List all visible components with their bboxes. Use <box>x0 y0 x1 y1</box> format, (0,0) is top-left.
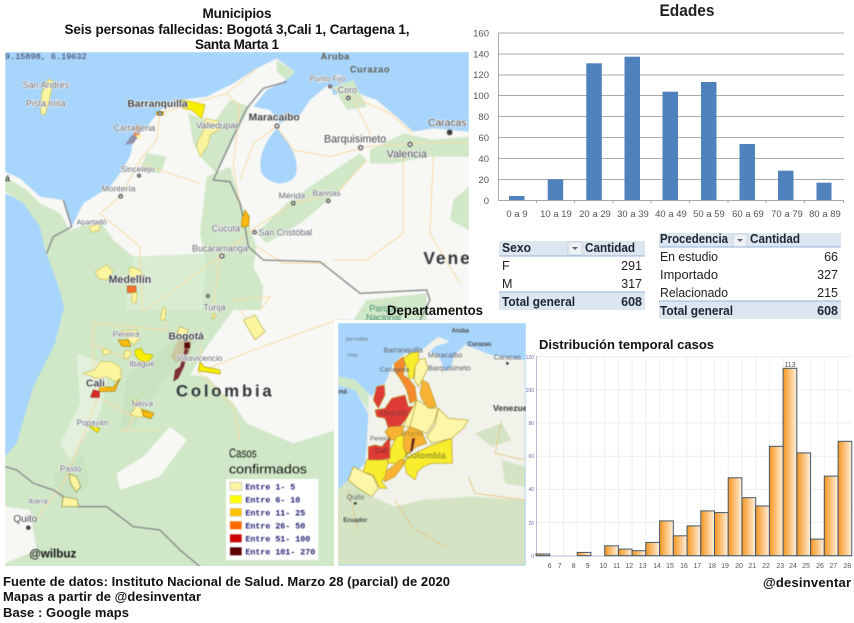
bar chart: distribución temporal: 8 <box>572 563 576 570</box>
place labels south: Villavicencio <box>177 353 223 363</box>
legend: casos confirmados: confirmados <box>229 462 307 477</box>
bar chart: distribución temporal: 120 <box>526 355 534 361</box>
place labels north: Venezuela <box>423 248 525 268</box>
place labels north: Aruba <box>321 51 350 61</box>
source notes <box>3 574 450 620</box>
table: procedencia <box>659 232 841 319</box>
table: procedencia: 66 <box>824 250 838 264</box>
table: sexo: 291 <box>621 259 642 273</box>
heading: distribución temporal: Distribución temporal casos <box>539 337 714 352</box>
bar chart: distribución temporal: 18 <box>708 563 716 570</box>
place labels north <box>5 52 469 320</box>
table: sexo: 608 <box>621 295 642 309</box>
municipal polygons north <box>41 79 53 115</box>
green relief north <box>5 177 134 310</box>
bar chart: distribución temporal: 23 <box>776 563 784 570</box>
legend: casos confirmados: Entre 1- 5 <box>245 482 295 492</box>
place labels: Barranquilla <box>384 346 424 355</box>
place labels: Pista <box>348 353 358 358</box>
bar chart: edades: 10 a 19 <box>540 209 572 220</box>
municipal polygons south <box>62 315 265 507</box>
place labels north: Cúcuta <box>212 224 240 234</box>
bar chart: distribución temporal: 11 <box>613 563 620 570</box>
table: procedencia: Procedencia <box>660 232 729 246</box>
place labels south: Pereira <box>113 329 140 339</box>
place labels: má <box>338 389 348 395</box>
place labels north: Parque <box>369 304 398 314</box>
heading: edades: Edades <box>660 2 714 20</box>
bar chart: distribución temporal: 22 <box>762 563 770 570</box>
place labels north: Punto Fijo <box>309 74 346 83</box>
legend: casos confirmados: Entre 101- 270 <box>245 547 315 557</box>
place labels: Cartagena <box>380 366 410 373</box>
bar chart: distribución temporal: 0 <box>531 554 534 560</box>
place labels: Quito <box>347 492 364 501</box>
place labels north: Pista Inita <box>26 99 65 109</box>
credit: desinventar: @desinventar <box>763 575 851 590</box>
land south <box>5 310 337 567</box>
place labels north: Caracas <box>428 118 466 129</box>
bar chart: edades: 100 <box>473 91 489 102</box>
place labels <box>338 328 535 524</box>
bar chart: distribución temporal: 60 <box>528 454 534 460</box>
table: sexo: M <box>502 277 512 291</box>
bar chart: distribución temporal: 40 <box>528 487 534 493</box>
bar chart: edades: 140 <box>473 50 489 60</box>
roads north <box>100 68 469 320</box>
table: procedencia: 327 <box>817 268 838 282</box>
place labels: San Andrés <box>346 337 368 342</box>
bar chart: distribución temporal: 100 <box>526 388 534 394</box>
coordinate readout: 9.15898, 6.19632 <box>5 52 87 62</box>
panel: department map <box>338 323 535 566</box>
roads south <box>33 310 337 523</box>
source notes: Fuente de datos: Instituto Nacional de Salud. Marzo 28 (parcial) de 2020 <box>3 574 450 589</box>
bar chart: distribución temporal: 7 <box>558 563 562 570</box>
bar chart: distribución temporal: 17 <box>693 563 701 570</box>
base land <box>356 336 526 507</box>
place labels north: Bucaramanga <box>192 244 248 254</box>
table: sexo: Sexo <box>502 241 531 255</box>
place labels north: Montería <box>101 183 136 193</box>
place labels south: Colombia <box>176 382 272 401</box>
land mass north <box>5 58 469 320</box>
bar chart: distribución temporal: 113 <box>784 362 796 369</box>
legend: casos confirmados <box>226 446 318 560</box>
place labels north: Valencia <box>387 148 427 160</box>
place labels north: Valledupar <box>196 121 238 131</box>
place labels north: San Andrés <box>23 80 70 90</box>
place labels south: Quito <box>13 514 38 525</box>
table: procedencia: En estudio <box>660 250 718 264</box>
place labels south: Neiva <box>132 399 153 409</box>
city markers <box>119 85 452 297</box>
place labels north: Coro <box>338 85 357 95</box>
bar chart: distribución temporal: 20 <box>735 563 743 570</box>
place labels: Colombia <box>405 450 447 460</box>
legend: casos confirmados: Entre 26- 50 <box>245 521 305 531</box>
title: municipios: Municipios <box>202 6 272 21</box>
credit: wilbuz: @wilbuz <box>29 548 76 561</box>
legend: casos confirmados: Entre 51- 100 <box>245 534 310 544</box>
bar chart: distribución temporal: 15 <box>666 563 674 570</box>
legend: casos confirmados: Casos <box>229 446 257 461</box>
bar chart: edades <box>473 28 844 220</box>
place labels: Venezuela <box>493 403 535 413</box>
title: municipios <box>64 6 410 52</box>
table: procedencia: Total general <box>660 304 733 318</box>
bar chart: edades: 0 <box>484 196 489 207</box>
place labels south: Ibarra <box>28 497 48 506</box>
place labels south: Ibagué <box>129 359 155 369</box>
legend: casos confirmados: Entre 6- 10 <box>245 495 300 505</box>
borders south <box>5 467 200 567</box>
bar chart: edades: 0 a 9 <box>506 209 528 220</box>
place labels north: Sincelejo <box>121 164 155 174</box>
table: sexo: Cantidad <box>585 241 635 255</box>
place labels north: Barquisimeto <box>324 133 386 145</box>
place labels north: San Cristóbal <box>258 227 312 237</box>
bar chart: edades: 120 <box>473 70 489 81</box>
place labels: Bogotá <box>401 430 423 437</box>
place labels: Medellín <box>380 409 407 418</box>
bar chart: edades: 80 a 89 <box>809 209 841 220</box>
bar chart: distribución temporal: 27 <box>829 563 837 570</box>
place labels south: Cali <box>86 379 105 390</box>
table: procedencia: 608 <box>817 304 838 318</box>
bar chart: edades: 40 <box>478 154 489 165</box>
title: municipios: Santa Marta 1 <box>195 37 279 52</box>
place labels: Pereira <box>370 435 391 442</box>
table: procedencia: Importado <box>660 268 718 282</box>
place labels south: Pasto <box>60 464 82 474</box>
place labels south: Bogotá <box>168 331 204 342</box>
bar chart: edades: 160 <box>473 28 489 40</box>
bar chart: distribución temporal: 80 <box>528 421 534 427</box>
bar chart: edades: 60 <box>478 133 489 144</box>
place labels: Cali <box>375 446 388 455</box>
source notes: Mapas a partir de @desinventar <box>3 589 201 604</box>
place labels south: Popayán <box>77 418 108 427</box>
legend: casos confirmados: Entre 11- 25 <box>245 508 305 518</box>
place labels: Aruba <box>452 328 470 334</box>
place labels north: Nacional <box>366 313 401 323</box>
place labels: Caracas <box>494 352 521 361</box>
place labels north: á <box>5 174 11 184</box>
panel: municipal map <box>5 52 469 566</box>
place labels north: Curazao <box>350 64 390 74</box>
bar chart: edades: 60 a 69 <box>732 209 764 220</box>
table: procedencia: Relacionado <box>660 286 728 300</box>
table: sexo: Total general <box>502 295 575 309</box>
bar chart: distribución temporal: 10 <box>599 563 607 570</box>
bar chart: distribución temporal: 20 <box>528 521 534 527</box>
place labels north: Tunja <box>203 303 225 313</box>
table: sexo: F <box>502 259 510 273</box>
bar chart: edades: 50 a 59 <box>693 209 725 220</box>
place labels: Barquisimeto <box>428 364 471 373</box>
bar chart: distribución temporal: 9 <box>586 563 590 570</box>
bar chart: distribución temporal <box>526 355 852 570</box>
bar chart: edades: 40 a 49 <box>655 209 687 220</box>
place labels north: Cartagena <box>113 123 155 133</box>
place labels north: Maracaibo <box>249 113 300 124</box>
borders north <box>213 82 430 320</box>
bar chart: distribución temporal: 28 <box>843 563 851 570</box>
place labels south <box>13 329 272 531</box>
table: procedencia: Cantidad <box>750 232 800 246</box>
bar chart: edades: 20 <box>478 175 489 186</box>
place labels: Ecuador <box>343 518 368 524</box>
place labels north: Mérida <box>279 191 305 201</box>
place labels north: Barinas <box>312 188 341 198</box>
bar chart: distribución temporal: 19 <box>721 563 729 570</box>
bar chart: distribución temporal: 12 <box>625 563 633 570</box>
bar chart: edades: 80 <box>478 112 489 123</box>
table: procedencia: 215 <box>817 286 838 300</box>
bar chart: distribución temporal: 26 <box>816 563 824 570</box>
bar chart: edades: 20 a 29 <box>579 209 611 220</box>
place labels: Curazao <box>468 342 492 348</box>
heading: departamentos: Departamentos <box>387 303 483 318</box>
place labels north: Apartadó <box>77 218 106 227</box>
bar chart: distribución temporal: 14 <box>653 563 661 570</box>
bar chart: edades: 70 a 79 <box>771 209 803 220</box>
place labels north: Medellín <box>109 274 151 286</box>
bar chart: distribución temporal: 21 <box>748 563 756 570</box>
bar chart: distribución temporal: 25 <box>802 563 810 570</box>
place labels: Maracaibo <box>428 351 462 360</box>
departments <box>348 352 468 497</box>
bar chart: distribución temporal: 16 <box>680 563 688 570</box>
table: sexo <box>499 241 645 310</box>
bar chart: distribución temporal: 6 <box>548 563 552 570</box>
source notes: Base : Google maps <box>3 605 129 620</box>
bar chart: distribución temporal: 13 <box>639 563 647 570</box>
table: sexo: 317 <box>621 277 642 291</box>
title: municipios: Seis personas fallecidas: Bogotá 3,Cali 1, Cartagena 1, <box>64 22 410 37</box>
bar chart: edades: 30 a 39 <box>617 209 649 220</box>
bar chart: distribución temporal: 24 <box>789 563 797 570</box>
place labels north: Barranquilla <box>127 99 188 110</box>
